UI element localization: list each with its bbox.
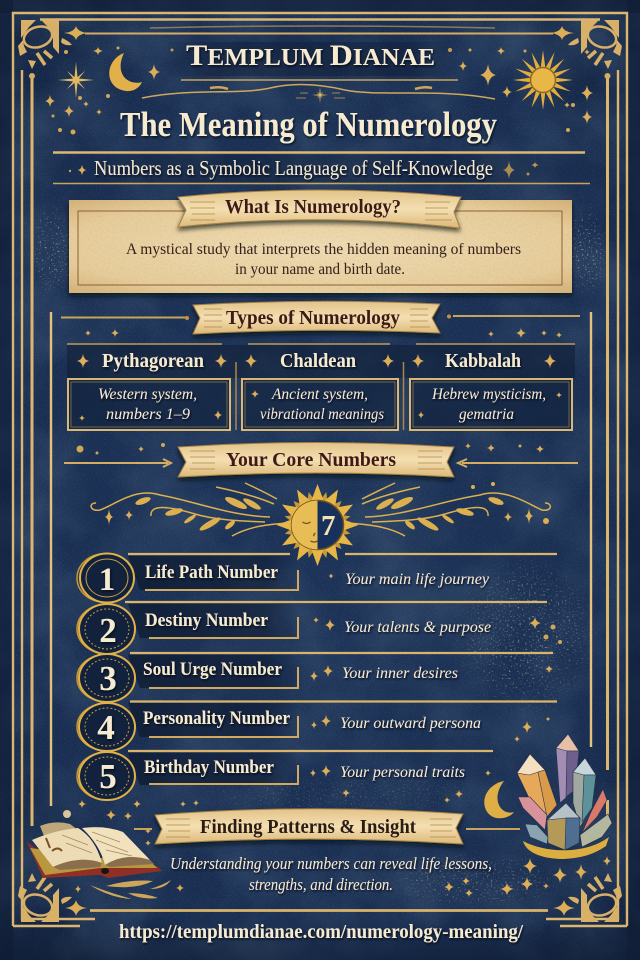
row 2: destiny: Destiny Number [145, 610, 269, 631]
footer url: https://templumdianae.com/numerology-meaning/ [119, 921, 523, 943]
icon: crescent moon small [484, 781, 514, 818]
column: Pythagorean: numbers 1–9 [106, 406, 190, 423]
list: core numbers [77, 554, 557, 800]
icon: radiant sun [513, 50, 573, 110]
row 4: personality [77, 703, 481, 751]
row 2: destiny: 2 [99, 611, 117, 650]
row 2: destiny [77, 604, 491, 654]
row 4: personality: 4 [97, 708, 115, 747]
arrow: right [458, 459, 578, 467]
divider rules [125, 554, 557, 751]
description text [126, 241, 521, 278]
row 3: soul urge: Soul Urge Number [143, 659, 283, 680]
section: types of numerology [61, 301, 580, 430]
scattered stars [45, 46, 611, 897]
description text: A mystical study that interprets the hidden meaning of numbers [126, 241, 521, 258]
ribbon heading [178, 190, 461, 228]
row 3: soul urge: Your inner desires [342, 665, 458, 682]
row 4: personality: Personality Number [143, 708, 290, 729]
row 3: soul urge [77, 654, 458, 702]
column: Chaldean [242, 350, 398, 430]
panel: what is numerology [69, 190, 572, 293]
title: The Meaning of Numerology [120, 105, 497, 144]
row 5: birthday: Your personal traits [340, 764, 465, 781]
row 3: soul urge: 3 [99, 659, 117, 698]
subtitle band [53, 152, 590, 184]
row 1: life path: Life Path Number [145, 562, 279, 583]
icon: half sun half moon with seven: 7 [321, 510, 336, 542]
subtitle text: Numbers as a Symbolic Language of Self-Knowledge [94, 156, 493, 180]
column: Pythagorean: Pythagorean [102, 350, 204, 372]
section heading: finding patterns and insight [134, 809, 520, 844]
row 1: life path [77, 554, 490, 602]
icon: crescent moon [109, 53, 142, 91]
column: Kabbalah: Hebrew mysticism, [431, 386, 546, 403]
ornament: vines [91, 482, 550, 536]
column: Chaldean: vibrational meanings [260, 406, 384, 423]
ornament: feathers [90, 880, 171, 899]
ribbon heading [193, 301, 440, 334]
row 5: birthday: 5 [99, 757, 117, 796]
row 1: life path: Your main life journey [345, 571, 490, 588]
section heading: your core numbers [64, 442, 578, 477]
brand name: TEMPLUM DIANAE [186, 39, 435, 72]
column: Pythagorean [68, 350, 230, 430]
ribbon heading: What Is Numerology? [225, 196, 401, 218]
header: Templum Dianae [160, 39, 460, 80]
column: Kabbalah: gematria [459, 406, 514, 423]
decorative flourish [142, 84, 495, 103]
row 1: life path: 1 [99, 562, 115, 598]
icon: half sun half moon with seven [276, 484, 358, 566]
closing text [170, 854, 492, 894]
row 2: destiny: Your talents & purpose [344, 619, 491, 636]
closing text: Understanding your numbers can reveal life lessons, [170, 854, 492, 873]
row 4: personality: Your outward persona [340, 715, 481, 732]
closing text: strengths, and direction. [249, 875, 393, 894]
ribbon heading: Types of Numerology [226, 307, 400, 329]
description text: in your name and birth date. [235, 261, 405, 278]
icon: crystals [517, 734, 612, 859]
column: Pythagorean: Western system, [98, 386, 197, 403]
column: Kabbalah: Kabbalah [445, 350, 521, 372]
arrow: left [64, 459, 171, 467]
column: Chaldean: Ancient system, [271, 386, 368, 403]
row 5: birthday [77, 752, 491, 800]
column: Kabbalah [410, 350, 572, 430]
section heading: your core numbers: Your Core Numbers [226, 449, 396, 471]
icon: starburst [58, 62, 94, 98]
row 5: birthday: Birthday Number [144, 757, 274, 778]
section heading: finding patterns and insight: Finding Patterns & Insight [200, 816, 416, 838]
icon: open book [27, 822, 162, 878]
column: Chaldean: Chaldean [280, 350, 356, 372]
